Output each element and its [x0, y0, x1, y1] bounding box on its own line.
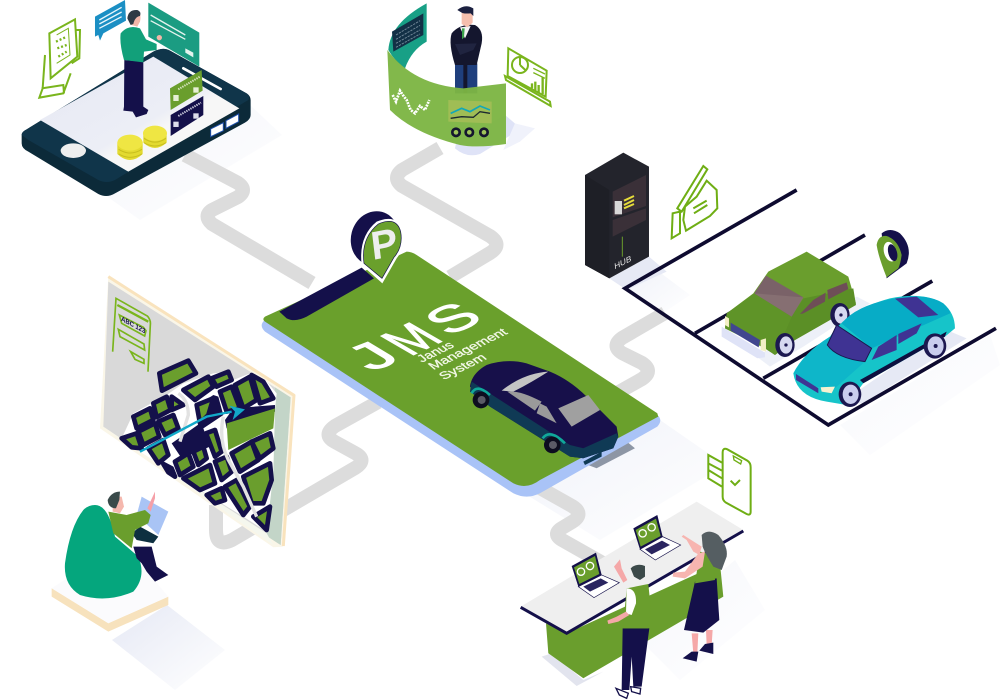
parking lines [625, 190, 996, 425]
home button [61, 143, 86, 158]
platform [52, 563, 168, 632]
laptop right [633, 515, 681, 560]
phone speaker [183, 68, 221, 89]
icon: plate form [113, 298, 150, 372]
connector road: central phone to service desk [540, 488, 608, 566]
green curved panel [387, 50, 506, 146]
beanbag [65, 505, 142, 598]
chat bubble [95, 0, 126, 41]
car shadows [757, 297, 870, 367]
JMS logo: S [410, 294, 495, 342]
city map [122, 361, 277, 532]
green card [170, 70, 203, 110]
phone green face [263, 252, 658, 486]
phone blue edge [262, 260, 660, 497]
phone screen [40, 57, 239, 172]
lower white wedge [103, 427, 273, 545]
subtitle [414, 326, 511, 382]
person using display [120, 10, 162, 117]
small tabs [211, 114, 239, 137]
car shadow [583, 433, 635, 468]
screen frame [100, 276, 295, 547]
icon: hand holding phone with QR [39, 19, 80, 98]
icon: laptop with charts [505, 48, 551, 106]
panel: service desk scene [521, 449, 751, 698]
icon: plate form: ABC 123 [121, 316, 146, 336]
screen frame top and right edges [108, 277, 294, 546]
ground shadows [105, 105, 1000, 690]
subtitle: Management [425, 326, 511, 372]
phone notch [279, 268, 374, 320]
dial gauges [452, 129, 488, 136]
dark card [171, 96, 203, 136]
woman at desk [673, 532, 727, 662]
laptop left [572, 553, 619, 598]
line chart [448, 100, 492, 123]
desk edge [521, 531, 743, 633]
man at desk [607, 559, 651, 698]
platform shadow [503, 123, 535, 150]
panel: central phone [262, 206, 660, 497]
subtitle: System [436, 352, 490, 382]
panel: analytics scene [387, 3, 551, 155]
panel: map screen and user [52, 276, 295, 632]
parking pin [345, 206, 405, 283]
dark blocks [172, 395, 275, 458]
parking pin: P [369, 220, 400, 269]
connector road: mobile app to central phone [185, 155, 312, 283]
businessman [451, 6, 482, 93]
panel: parking scene [585, 153, 996, 425]
person with laptop [108, 492, 168, 582]
green blocks [122, 361, 275, 530]
desk top [521, 502, 743, 633]
teal display panel [148, 3, 199, 67]
connector road: map screen to central phone [216, 402, 378, 542]
navy car [470, 361, 618, 465]
desk base [546, 563, 723, 678]
icon: mobile approval [708, 449, 751, 515]
connector road: parking to central phone [610, 313, 665, 397]
gold coins [117, 126, 167, 160]
location pin [877, 230, 909, 278]
JMS logo: M [367, 315, 456, 363]
green car [722, 252, 856, 358]
phone body [22, 49, 251, 196]
JMS logo [331, 294, 495, 378]
platform [455, 115, 517, 155]
screen side strip [267, 387, 291, 545]
kiosk shadow [609, 257, 667, 290]
screen face [103, 282, 291, 545]
JMS logo: J [331, 335, 414, 378]
dark data screen [392, 13, 423, 52]
main roads [178, 393, 257, 517]
cyan car [793, 296, 955, 407]
route arrow [140, 406, 245, 452]
map base [122, 372, 277, 532]
candlestick chart [393, 91, 429, 113]
subtitle: Janus [414, 339, 457, 365]
desk shadow [542, 653, 603, 686]
payment kiosk: HUB [614, 253, 632, 271]
teal curved panel [388, 3, 427, 68]
panel: mobile payment scene [22, 0, 251, 196]
icon: gate with car [672, 166, 717, 238]
phone top face [22, 49, 249, 182]
payment kiosk [585, 153, 649, 278]
connector road: analytics to central phone [397, 148, 496, 277]
